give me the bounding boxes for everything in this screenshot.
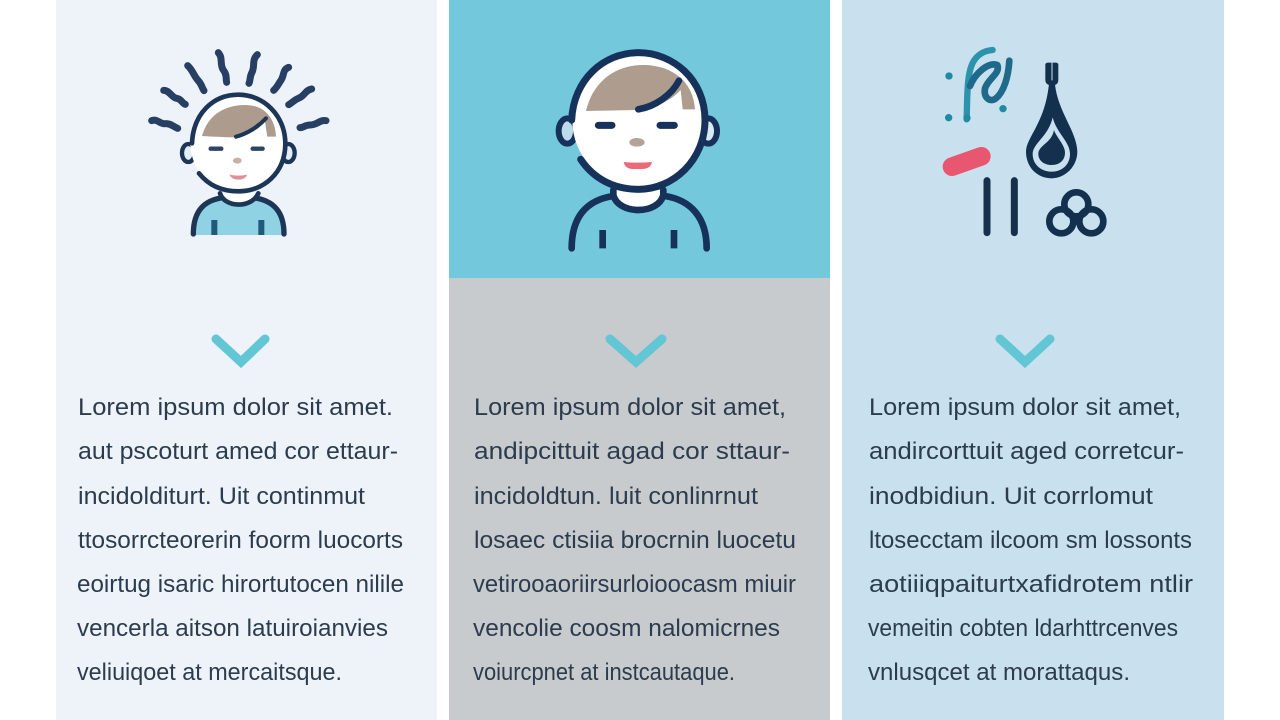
text block: left column: ttosorrcteorerin foorm luocorts (78, 527, 403, 554)
text block: left column: veliuiqoet at mercaitsque. (77, 659, 342, 686)
text block: left column (77, 394, 404, 686)
panel: right column (842, 0, 1224, 720)
text block: middle column: vetirooaoriirsurloioocasm miuir (473, 571, 796, 598)
text block: middle column: incidoldtun. luit conlinrnut (474, 483, 758, 510)
panel: middle column (449, 0, 830, 720)
panel: left column (56, 0, 437, 720)
text block: right column: inodbidiun. Uit corrlomut (869, 483, 1153, 510)
text block: right column: vnlusqcet at morattaqus. (868, 659, 1130, 686)
text block: right column: andircorttuit aged corretcur- (869, 438, 1184, 465)
text block: left column: vencerla aitson latuiroianvies (77, 615, 388, 642)
text block: middle column: losaec ctisiia brocrnin luocetu (474, 527, 796, 554)
text block: middle column: vencolie coosm nalomicrnes (473, 615, 780, 642)
icon: three linked rings (1049, 192, 1103, 233)
icon: symptom symbols with droplet and rings (945, 50, 1103, 233)
text block: right column: Lorem ipsum dolor sit amet, (869, 394, 1181, 421)
text block: middle column: andipcittuit agad cor sttaur- (474, 438, 790, 465)
icon: chevron (1000, 339, 1050, 362)
icon: droplet on a stem (1026, 63, 1077, 178)
text block: right column: vemeitin cobten ldarhttrcenves (868, 615, 1178, 642)
text block: left column: aut pscoturt amed cor ettaur- (78, 438, 398, 465)
text block: left column: Lorem ipsum dolor sit amet. (78, 394, 393, 421)
icon: child with radiating head pain lines (152, 53, 326, 235)
text block: right column: ltosecctam ilcoom sm lossonts (869, 527, 1192, 554)
text block: left column: eoirtug isaric hirortutocen nilile (77, 571, 404, 598)
panel header: teal background (449, 0, 830, 278)
text block: right column (868, 394, 1193, 686)
text block: middle column: Lorem ipsum dolor sit amet, (474, 394, 786, 421)
text block: middle column (473, 394, 796, 686)
icon: pink bandage (952, 156, 981, 167)
text block: middle column: voiurcpnet at instcautaque. (473, 659, 735, 686)
icon: two vertical bars (987, 181, 1014, 233)
icon: teal squiggle with dots (945, 50, 1009, 122)
icon: chevron (610, 339, 662, 362)
text block: left column: incidolditurt. Uit continmut (78, 483, 365, 510)
icon: chevron (216, 339, 265, 362)
text block: right column: aotiiiqpaiturtxafidrotem ntlir (869, 571, 1193, 598)
icon: calm child portrait (559, 53, 717, 248)
